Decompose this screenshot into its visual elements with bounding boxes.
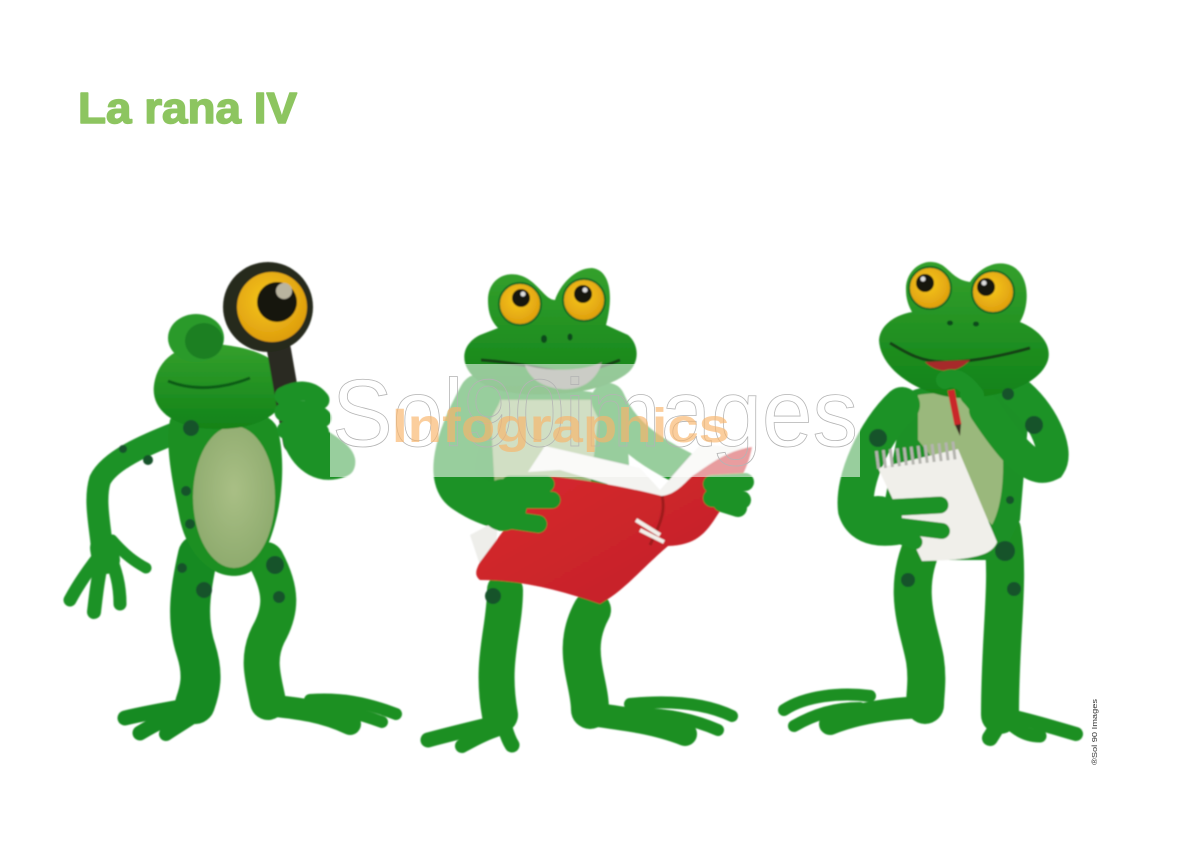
nostrils <box>947 320 953 326</box>
spots <box>119 420 285 603</box>
copyright credit: ®Sol 90 Images <box>1091 698 1099 765</box>
legs and feet <box>784 530 1076 738</box>
right leg and foot <box>262 560 396 724</box>
belly <box>193 426 275 568</box>
head <box>879 262 1049 398</box>
hand on notepad <box>854 496 942 542</box>
watermark band <box>330 364 860 477</box>
right hand <box>712 482 745 508</box>
belly <box>490 400 600 490</box>
torso <box>470 387 630 510</box>
eyes <box>909 267 951 309</box>
magnifier handle <box>279 350 295 442</box>
hand with pencil <box>945 378 1002 440</box>
legs and feet <box>428 590 732 746</box>
book ribbon marks <box>636 520 664 542</box>
nostrils <box>541 335 547 343</box>
belly <box>918 393 1003 525</box>
magnified eye <box>223 262 313 352</box>
hand on handle <box>284 391 342 467</box>
left arm <box>454 395 505 510</box>
torso <box>168 406 282 576</box>
mouth <box>168 378 250 388</box>
left leg and foot <box>125 555 201 734</box>
eyes <box>499 283 541 325</box>
frog: reading book <box>428 268 752 746</box>
right arm <box>985 392 1053 467</box>
leg spot <box>485 588 501 604</box>
left arm and hand <box>70 432 178 612</box>
frog: notepad <box>784 262 1076 738</box>
torso <box>885 384 1030 560</box>
watermark: Infographics: Infographics <box>392 400 730 453</box>
head <box>154 344 286 429</box>
book pages <box>528 445 745 500</box>
watermark: Sol90images: Sol90images <box>332 360 858 467</box>
head <box>464 268 637 394</box>
left hand <box>479 479 552 531</box>
book <box>476 447 752 604</box>
mouth <box>890 343 1030 362</box>
notepad <box>876 449 997 561</box>
mouth <box>481 360 620 372</box>
title: La rana IV <box>78 84 298 133</box>
pencil <box>951 390 961 436</box>
far eye bump <box>168 314 224 362</box>
frog: magnifying glass <box>70 262 396 734</box>
right arm <box>608 400 712 482</box>
left arm <box>856 405 905 528</box>
spots <box>869 388 1043 596</box>
